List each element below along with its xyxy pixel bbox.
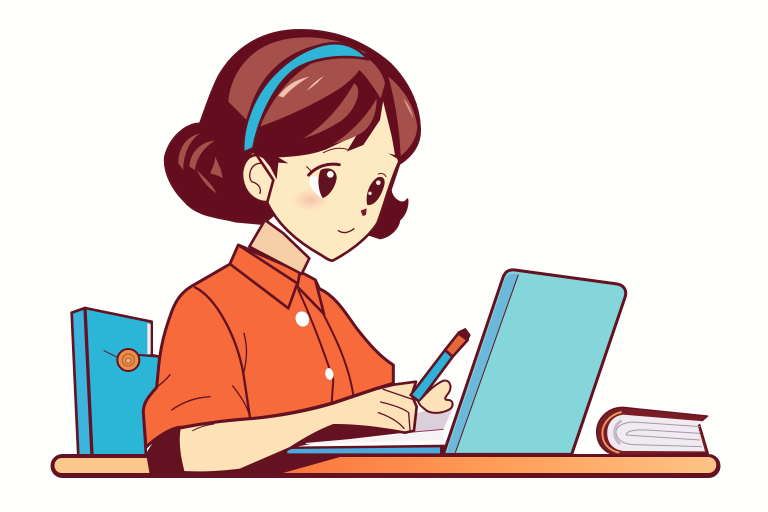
shirt seams	[157, 287, 353, 418]
neck	[249, 220, 309, 274]
shadow under arm	[146, 413, 413, 476]
fingers	[418, 381, 453, 413]
fringe strand	[383, 98, 399, 160]
arm and writing hand	[178, 382, 417, 473]
bangs	[250, 57, 419, 179]
face	[250, 97, 399, 261]
ear	[242, 155, 273, 202]
mouth	[338, 229, 354, 233]
shirt	[143, 245, 393, 447]
blush	[292, 189, 329, 211]
desk surface: left section	[54, 458, 170, 473]
laptop	[443, 270, 626, 454]
desk surface: right section	[283, 457, 716, 473]
back hair and bun	[165, 30, 420, 238]
crown hair	[228, 37, 367, 120]
pen and hand	[411, 329, 470, 413]
shirt buttons	[293, 310, 334, 381]
bun highlights	[178, 133, 223, 193]
right eye	[367, 173, 386, 205]
pen	[411, 329, 470, 402]
button on chair	[117, 349, 139, 371]
finger lines	[193, 389, 413, 431]
headband	[243, 43, 368, 153]
chair: blue backrest with button	[72, 308, 159, 457]
book on desk	[597, 407, 708, 455]
nose	[361, 208, 367, 216]
collar	[230, 245, 324, 314]
left eye	[307, 148, 347, 198]
desk	[52, 456, 719, 476]
girl: head	[165, 30, 420, 274]
notebook on desk	[283, 403, 455, 456]
girl: torso and arm	[143, 245, 455, 476]
